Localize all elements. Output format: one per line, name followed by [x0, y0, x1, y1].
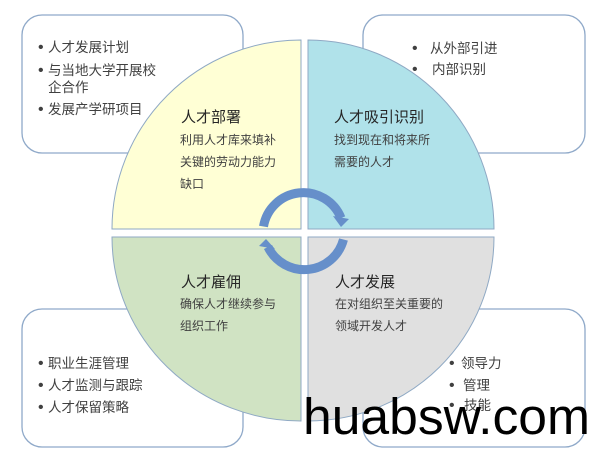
- text block: 人才部署 description: 缺口: [180, 176, 204, 191]
- text block: 人才部署 description: 利用人才库来填补: [180, 132, 276, 147]
- list: bottom-left bullets: 人才监测与跟踪: [48, 378, 143, 393]
- list: top-left bullets: [38, 39, 156, 118]
- panel: blue quadrant 人才吸引识别: [308, 40, 494, 229]
- list: top-right bullets: •: [412, 61, 418, 78]
- list: bottom-right bullets: •: [449, 377, 455, 394]
- panel: yellow quadrant 人才部署: [112, 40, 301, 229]
- text block: 人才发展 description: 在对组织至关重要的: [335, 296, 443, 311]
- list: bottom-left bullets: •: [38, 355, 44, 372]
- arrow: top clockwise arc: [264, 193, 349, 227]
- heading: 人才雇佣: 人才雇佣: [181, 274, 241, 291]
- list: top-right bullets: •: [412, 40, 418, 57]
- heading: 人才发展: 人才发展: [335, 274, 395, 291]
- list: top-left bullets: 发展产学研项目: [48, 102, 142, 117]
- list: top-left bullets: 与当地大学开展校: [48, 62, 156, 78]
- list: bottom-left bullets: 职业生涯管理: [48, 356, 129, 371]
- text block: 人才雇佣 description: 确保人才继续参与: [180, 296, 276, 311]
- list: bottom-right bullets: •: [449, 397, 455, 414]
- list: bottom-right bullets: •: [449, 355, 455, 372]
- list: bottom-left bullets: [38, 355, 143, 416]
- text block: 人才发展 description: [335, 296, 443, 333]
- text block: 人才吸引识别 description: [334, 133, 430, 169]
- list: top-left bullets: •: [38, 101, 44, 118]
- list: bottom-right bullets: [449, 355, 502, 414]
- arrow: bottom clockwise arc: [259, 239, 344, 270]
- text block: 人才发展 description: 领域开发人才: [335, 318, 407, 333]
- list: bottom-right bullets: 领导力: [461, 356, 502, 371]
- panel: bottom-left list box: [22, 309, 243, 447]
- watermark: huabsw.com: huabsw.com: [303, 388, 590, 445]
- list: top-right bullets: [412, 40, 498, 78]
- list: top-left bullets: 人才发展计划: [48, 40, 129, 55]
- text block: 人才雇佣 description: 组织工作: [180, 319, 228, 333]
- heading: 人才吸引识别: 人才吸引识别: [334, 109, 424, 126]
- panel: green quadrant 人才雇佣: [112, 237, 301, 421]
- list: bottom-left bullets: 人才保留策略: [48, 399, 129, 415]
- list: bottom-right bullets: 管理: [463, 378, 490, 393]
- heading: 人才部署: 人才部署: [181, 109, 241, 126]
- text block: 人才部署 description: [180, 132, 276, 191]
- panel: top-left list box: [22, 15, 243, 153]
- panel: bottom-right list box: [363, 309, 585, 447]
- list: bottom-left bullets: •: [38, 399, 44, 416]
- text block: 人才部署 description: 关键的劳动力能力: [180, 154, 276, 169]
- list: top-left bullets: •: [38, 39, 44, 56]
- list: top-right bullets: 内部识别: [432, 62, 486, 77]
- list: top-left bullets: 企合作: [48, 79, 88, 95]
- text block: 人才吸引识别 description: 需要的人才: [334, 154, 394, 169]
- text block: 人才吸引识别 description: 找到现在和将来所: [334, 133, 430, 147]
- list: bottom-right bullets: 技能: [464, 398, 491, 413]
- text block: 人才雇佣 description: [180, 296, 276, 333]
- list: bottom-left bullets: •: [38, 377, 44, 394]
- list: top-left bullets: •: [38, 62, 44, 79]
- panel: gray quadrant 人才发展: [308, 237, 494, 421]
- list: top-right bullets: 从外部引进: [430, 41, 498, 56]
- panel: top-right list box: [363, 15, 585, 153]
